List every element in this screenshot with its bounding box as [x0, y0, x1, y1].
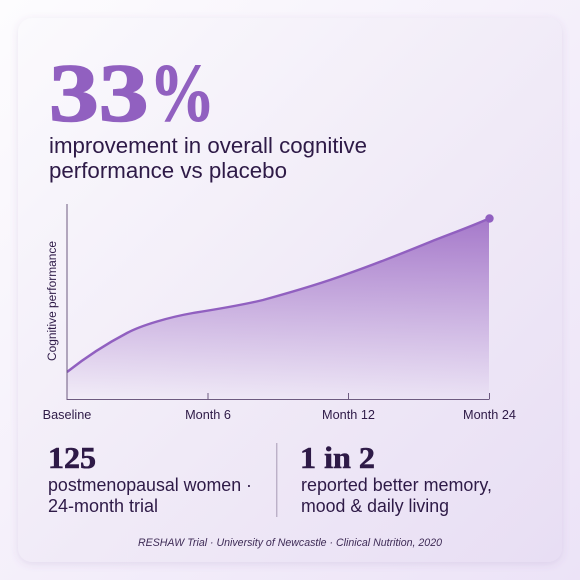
- headline stat: 33%: 33: [49, 46, 149, 139]
- stat: 1 in 2: [300, 441, 492, 516]
- x axis labels: Month 6: [185, 408, 231, 422]
- headline stat: 33%: %: [150, 47, 215, 139]
- headline stat: 33%: [49, 46, 215, 139]
- stat: 125 women: postmenopausal women ·: [48, 475, 252, 495]
- x axis labels: Baseline: [43, 408, 91, 422]
- headline description: performance vs placebo: [49, 158, 287, 183]
- stat: 1 in 2: 1 in 2: [300, 441, 375, 475]
- source citation: RESHAW Trial · University of Newcastle · Clinical Nutrition, 2020: [138, 537, 443, 549]
- chart: cognitive performance over time: [43, 204, 516, 422]
- headline description: [49, 133, 367, 183]
- axes: [67, 204, 490, 400]
- headline description: improvement in overall cognitive: [49, 133, 367, 158]
- stat: 125 women: 24-month trial: [48, 496, 158, 516]
- x axis labels: Month 24: [463, 408, 516, 422]
- x axis labels: [43, 408, 516, 422]
- stat: 1 in 2: reported better memory,: [301, 475, 492, 495]
- trend line: [67, 218, 489, 372]
- y axis label: Cognitive performance: [47, 241, 59, 361]
- divider: [276, 443, 277, 517]
- area under curve: [67, 218, 489, 398]
- end point marker: [485, 214, 494, 223]
- stat: 1 in 2: mood & daily living: [301, 496, 449, 516]
- stat: 125 women: 125: [48, 441, 96, 475]
- stat: 125 women: [48, 441, 252, 516]
- x axis labels: Month 12: [322, 408, 375, 422]
